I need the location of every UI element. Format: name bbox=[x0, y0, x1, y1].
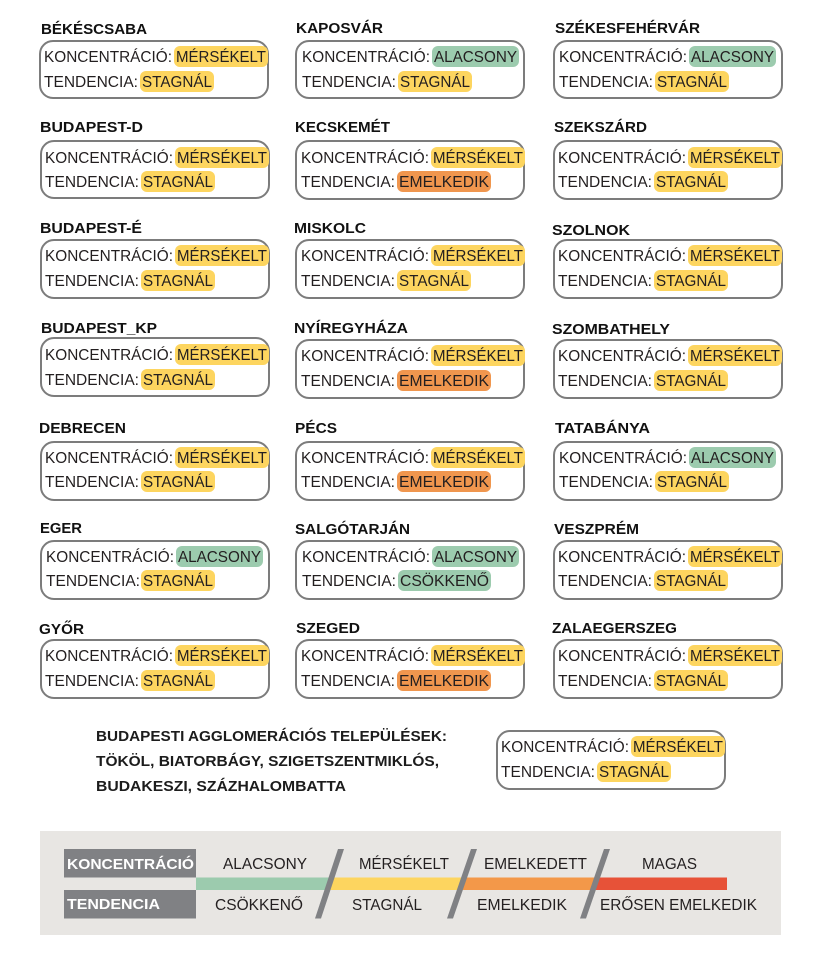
city name: BUDAPEST_KP bbox=[41, 321, 157, 337]
concentration row bbox=[301, 245, 525, 266]
city name: ZALAEGERSZEG bbox=[552, 621, 677, 637]
trend row bbox=[559, 71, 729, 92]
concentration row: MÉRSÉKELT bbox=[690, 348, 781, 365]
legend header: tendencia: TENDENCIA bbox=[67, 896, 160, 913]
trend row: STAGNÁL bbox=[657, 74, 727, 91]
concentration row: MÉRSÉKELT bbox=[177, 248, 268, 265]
concentration row: MÉRSÉKELT bbox=[177, 648, 268, 665]
trend row: STAGNÁL bbox=[143, 573, 213, 590]
concentration levels bbox=[223, 856, 697, 873]
concentration row bbox=[44, 46, 268, 67]
trend row bbox=[558, 370, 728, 391]
card: KECSKEMÉT bbox=[295, 119, 525, 199]
trend row bbox=[45, 270, 215, 291]
concentration row: MÉRSÉKELT bbox=[690, 648, 781, 665]
concentration row: KONCENTRÁCIÓ: bbox=[559, 450, 687, 467]
concentration row: ALACSONY bbox=[691, 49, 774, 66]
card: BUDAPEST-D bbox=[40, 120, 269, 198]
concentration row: MÉRSÉKELT bbox=[177, 150, 268, 167]
concentration row bbox=[45, 447, 269, 468]
trend row: TENDENCIA: bbox=[301, 174, 395, 191]
trend row bbox=[301, 670, 491, 691]
agglomeration settlements text: BUDAPESTI AGGLOMERÁCIÓS TELEPÜLÉSEK: bbox=[96, 727, 447, 745]
concentration row bbox=[45, 245, 269, 266]
box bbox=[41, 141, 269, 198]
card: SZÉKESFEHÉRVÁR bbox=[554, 20, 782, 98]
concentration row: MÉRSÉKELT bbox=[433, 348, 524, 365]
trend row: STAGNÁL bbox=[143, 273, 213, 290]
trend row bbox=[301, 370, 491, 391]
concentration row: KONCENTRÁCIÓ: bbox=[558, 150, 686, 167]
card: agglomeration bbox=[497, 731, 725, 789]
trend levels bbox=[215, 896, 758, 914]
box bbox=[554, 141, 782, 199]
card: SZOLNOK bbox=[552, 223, 782, 298]
concentration row: MÉRSÉKELT bbox=[690, 150, 781, 167]
trend row bbox=[45, 171, 215, 192]
box bbox=[41, 541, 269, 599]
card: DEBRECEN bbox=[39, 421, 269, 500]
box bbox=[554, 41, 782, 98]
trend row: STAGNÁL bbox=[143, 372, 213, 389]
trend row: TENDENCIA: bbox=[44, 74, 138, 91]
trend row: STAGNÁL bbox=[400, 74, 470, 91]
concentration row: KONCENTRÁCIÓ: bbox=[301, 248, 429, 265]
box bbox=[296, 141, 524, 199]
trend row: TENDENCIA: bbox=[45, 474, 139, 491]
city name: EGER bbox=[40, 521, 83, 537]
city name: SZOLNOK bbox=[552, 223, 631, 239]
city name: GYŐR bbox=[39, 620, 85, 638]
trend row: STAGNÁL bbox=[656, 373, 726, 390]
card: VESZPRÉM bbox=[554, 521, 782, 599]
concentration row: KONCENTRÁCIÓ: bbox=[45, 347, 173, 364]
trend row: STAGNÁL bbox=[656, 174, 726, 191]
legend header: tendencia bbox=[64, 890, 196, 918]
trend row: STAGNÁL bbox=[142, 74, 212, 91]
box bbox=[296, 41, 524, 98]
concentration row: MÉRSÉKELT bbox=[433, 150, 524, 167]
trend row: TENDENCIA: bbox=[559, 74, 653, 91]
trend row bbox=[558, 570, 728, 591]
box bbox=[554, 541, 782, 599]
concentration row bbox=[302, 46, 519, 67]
concentration row bbox=[301, 645, 525, 666]
concentration row: KONCENTRÁCIÓ: bbox=[44, 49, 172, 66]
card: TATABÁNYA bbox=[554, 420, 782, 500]
city name: SALGÓTARJÁN bbox=[295, 520, 410, 538]
trend row bbox=[301, 270, 471, 291]
card: ZALAEGERSZEG bbox=[552, 621, 782, 698]
scale dividers bbox=[315, 849, 610, 918]
box bbox=[296, 240, 524, 298]
trend row: STAGNÁL bbox=[143, 673, 213, 690]
concentration levels: EMELKEDETT bbox=[484, 856, 588, 873]
trend row bbox=[45, 369, 215, 390]
concentration row: ALACSONY bbox=[691, 450, 774, 467]
city name: BUDAPEST-D bbox=[40, 120, 143, 136]
concentration row bbox=[45, 147, 269, 168]
concentration row: KONCENTRÁCIÓ: bbox=[558, 248, 686, 265]
trend row: TENDENCIA: bbox=[558, 273, 652, 290]
trend row: STAGNÁL bbox=[143, 474, 213, 491]
trend row bbox=[45, 670, 215, 691]
concentration row: KONCENTRÁCIÓ: bbox=[45, 150, 173, 167]
legend header: koncentráció bbox=[64, 849, 196, 878]
trend levels: CSÖKKENŐ bbox=[215, 896, 303, 914]
card: BUDAPEST-É bbox=[40, 220, 269, 298]
concentration row: KONCENTRÁCIÓ: bbox=[301, 348, 429, 365]
card: BUDAPEST_KP bbox=[41, 321, 269, 396]
trend row: STAGNÁL bbox=[656, 573, 726, 590]
card: SZEKSZÁRD bbox=[554, 119, 782, 199]
concentration row: ALACSONY bbox=[178, 549, 261, 566]
card: KAPOSVÁR bbox=[296, 20, 524, 98]
trend row: TENDENCIA: bbox=[302, 573, 396, 590]
trend row: STAGNÁL bbox=[399, 273, 469, 290]
trend row bbox=[558, 670, 728, 691]
concentration row bbox=[501, 736, 725, 757]
city name: SZÉKESFEHÉRVÁR bbox=[555, 20, 701, 37]
concentration row: MÉRSÉKELT bbox=[176, 49, 267, 66]
concentration row: KONCENTRÁCIÓ: bbox=[302, 49, 430, 66]
trend row bbox=[44, 71, 214, 92]
concentration row: KONCENTRÁCIÓ: bbox=[501, 739, 629, 756]
concentration row bbox=[558, 345, 782, 366]
trend row bbox=[501, 761, 671, 782]
scale bar bbox=[196, 878, 727, 890]
concentration row bbox=[301, 345, 525, 366]
concentration row: ALACSONY bbox=[434, 549, 517, 566]
concentration row bbox=[45, 645, 269, 666]
concentration row bbox=[558, 645, 782, 666]
trend row: TENDENCIA: bbox=[46, 573, 140, 590]
city name: KECSKEMÉT bbox=[295, 119, 390, 136]
agglomeration settlements text: TÖKÖL, BIATORBÁGY, SZIGETSZENTMIKLÓS, bbox=[96, 752, 439, 770]
card: NYÍREGYHÁZA bbox=[294, 320, 525, 398]
box bbox=[497, 731, 725, 789]
trend row: EMELKEDIK bbox=[399, 373, 490, 390]
trend row: TENDENCIA: bbox=[301, 673, 395, 690]
concentration row: MÉRSÉKELT bbox=[690, 248, 781, 265]
concentration row bbox=[558, 546, 782, 567]
concentration row: MÉRSÉKELT bbox=[177, 347, 268, 364]
concentration row: KONCENTRÁCIÓ: bbox=[46, 549, 174, 566]
concentration levels: MÉRSÉKELT bbox=[359, 856, 450, 873]
trend row: TENDENCIA: bbox=[301, 273, 395, 290]
trend levels: ERŐSEN EMELKEDIK bbox=[600, 897, 758, 914]
city name: VESZPRÉM bbox=[554, 521, 639, 538]
city name: SZOMBATHELY bbox=[552, 322, 670, 338]
box bbox=[41, 338, 269, 396]
trend row: TENDENCIA: bbox=[558, 373, 652, 390]
trend row bbox=[302, 71, 472, 92]
concentration row: ALACSONY bbox=[434, 49, 517, 66]
city name: PÉCS bbox=[295, 420, 337, 437]
trend row: TENDENCIA: bbox=[559, 474, 653, 491]
concentration row bbox=[559, 46, 776, 67]
concentration row: MÉRSÉKELT bbox=[433, 248, 524, 265]
concentration row bbox=[301, 447, 525, 468]
trend row: TENDENCIA: bbox=[558, 174, 652, 191]
box bbox=[40, 41, 268, 98]
concentration levels: ALACSONY bbox=[223, 856, 307, 873]
trend row bbox=[558, 270, 728, 291]
trend row: TENDENCIA: bbox=[45, 673, 139, 690]
concentration row: KONCENTRÁCIÓ: bbox=[301, 150, 429, 167]
concentration row: MÉRSÉKELT bbox=[690, 549, 781, 566]
city name: SZEKSZÁRD bbox=[554, 119, 647, 136]
concentration row: MÉRSÉKELT bbox=[433, 648, 524, 665]
trend row bbox=[302, 570, 491, 591]
concentration row bbox=[558, 147, 782, 168]
card: GYŐR bbox=[39, 620, 269, 698]
trend row: STAGNÁL bbox=[657, 474, 727, 491]
concentration row: MÉRSÉKELT bbox=[633, 739, 724, 756]
concentration row bbox=[45, 344, 269, 365]
box bbox=[296, 340, 524, 398]
city name: BUDAPEST-É bbox=[40, 220, 142, 237]
concentration row: KONCENTRÁCIÓ: bbox=[302, 549, 430, 566]
concentration row: KONCENTRÁCIÓ: bbox=[45, 450, 173, 467]
concentration row bbox=[302, 546, 519, 567]
trend row: STAGNÁL bbox=[656, 673, 726, 690]
card: SZEGED bbox=[296, 621, 525, 698]
box bbox=[296, 541, 524, 599]
trend row bbox=[301, 171, 491, 192]
concentration row: KONCENTRÁCIÓ: bbox=[558, 348, 686, 365]
agglomeration settlements text bbox=[96, 727, 447, 795]
city name: TATABÁNYA bbox=[555, 420, 651, 437]
card: PÉCS bbox=[295, 420, 525, 500]
card: MISKOLC bbox=[294, 221, 525, 298]
trend row bbox=[46, 570, 215, 591]
box bbox=[554, 640, 782, 698]
city name: NYÍREGYHÁZA bbox=[294, 320, 409, 337]
card: BÉKÉSCSABA bbox=[40, 21, 268, 98]
trend row: TENDENCIA: bbox=[302, 74, 396, 91]
trend levels: EMELKEDIK bbox=[477, 897, 568, 914]
trend row: TENDENCIA: bbox=[558, 573, 652, 590]
trend row bbox=[558, 171, 728, 192]
card: SZOMBATHELY bbox=[552, 322, 782, 398]
city name: MISKOLC bbox=[294, 221, 367, 237]
panel: legend bbox=[40, 831, 781, 935]
trend row: EMELKEDIK bbox=[399, 673, 490, 690]
box bbox=[41, 442, 269, 500]
city name: DEBRECEN bbox=[39, 421, 126, 437]
trend row: TENDENCIA: bbox=[45, 273, 139, 290]
concentration row: MÉRSÉKELT bbox=[433, 450, 524, 467]
city name: KAPOSVÁR bbox=[296, 20, 384, 37]
concentration row: KONCENTRÁCIÓ: bbox=[45, 648, 173, 665]
box bbox=[41, 640, 269, 698]
concentration row: MÉRSÉKELT bbox=[177, 450, 268, 467]
trend row: TENDENCIA: bbox=[558, 673, 652, 690]
city name: SZEGED bbox=[296, 621, 360, 637]
box bbox=[296, 640, 524, 698]
trend row: STAGNÁL bbox=[599, 764, 669, 781]
trend row: TENDENCIA: bbox=[301, 373, 395, 390]
box bbox=[554, 442, 782, 500]
box bbox=[554, 340, 782, 398]
concentration row: KONCENTRÁCIÓ: bbox=[301, 450, 429, 467]
box bbox=[41, 240, 269, 298]
concentration row: KONCENTRÁCIÓ: bbox=[558, 549, 686, 566]
concentration row bbox=[558, 245, 782, 266]
concentration row bbox=[559, 447, 776, 468]
box bbox=[296, 442, 524, 500]
legend header: koncentráció: KONCENTRÁCIÓ bbox=[67, 855, 194, 873]
concentration row: KONCENTRÁCIÓ: bbox=[559, 49, 687, 66]
concentration row bbox=[46, 546, 263, 567]
trend levels: STAGNÁL bbox=[352, 897, 422, 914]
trend row: EMELKEDIK bbox=[399, 474, 490, 491]
trend row: CSÖKKENŐ bbox=[400, 572, 489, 590]
trend row: STAGNÁL bbox=[143, 174, 213, 191]
agglomeration settlements text: BUDAKESZI, SZÁZHALOMBATTA bbox=[96, 778, 347, 795]
trend row bbox=[301, 471, 491, 492]
concentration levels: MAGAS bbox=[642, 856, 697, 873]
concentration row: KONCENTRÁCIÓ: bbox=[558, 648, 686, 665]
concentration row: KONCENTRÁCIÓ: bbox=[301, 648, 429, 665]
box bbox=[554, 240, 782, 298]
trend row bbox=[559, 471, 729, 492]
card: EGER bbox=[40, 521, 269, 599]
trend row bbox=[45, 471, 215, 492]
card: SALGÓTARJÁN bbox=[295, 520, 524, 599]
trend row: STAGNÁL bbox=[656, 273, 726, 290]
trend row: TENDENCIA: bbox=[501, 764, 595, 781]
city name: BÉKÉSCSABA bbox=[41, 21, 148, 38]
trend row: TENDENCIA: bbox=[301, 474, 395, 491]
concentration row bbox=[301, 147, 525, 168]
trend row: EMELKEDIK bbox=[399, 174, 490, 191]
concentration row: KONCENTRÁCIÓ: bbox=[45, 248, 173, 265]
trend row: TENDENCIA: bbox=[45, 174, 139, 191]
trend row: TENDENCIA: bbox=[45, 372, 139, 389]
